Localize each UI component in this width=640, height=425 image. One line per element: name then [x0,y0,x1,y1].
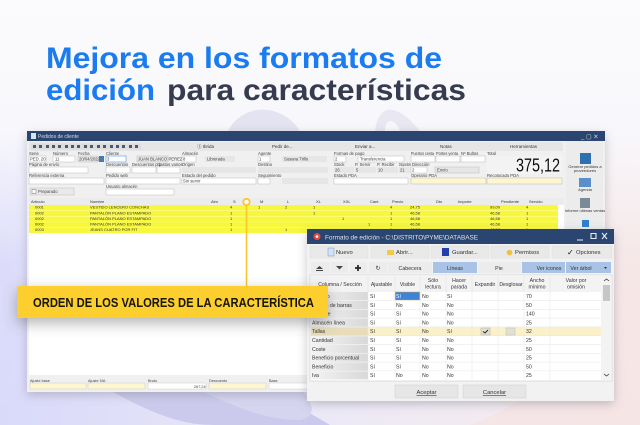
articles table: 1 [390,216,393,221]
toolbar: Herramientas [510,144,538,149]
table header: Columna / Sección [318,282,362,288]
order form fields: Seguimiento [258,173,282,178]
row labels: Artículo [312,294,330,300]
total amount [487,156,562,176]
row labels: Coste [312,347,326,353]
row values: No [422,329,429,335]
dialog: formato de edición [307,229,614,401]
articles table: 0003 [35,227,45,232]
articles table: S [233,199,236,204]
row values: No [447,320,454,326]
order form fields: 26 [335,168,340,172]
dialog tabs [311,262,611,273]
order form fields: 2 [412,168,415,172]
row values: Sí [370,303,375,309]
totals strip [30,379,309,389]
row values: Sí [370,356,375,362]
dialog tabs: Pie [495,266,503,272]
row labels: Nombre [312,312,331,318]
row values: No [422,294,429,300]
order form fields: 8 [183,156,186,162]
articles table: Alm [211,199,219,204]
articles table: 46,58 [490,227,501,232]
articles table: PANTALÓN PLANO ESTAMPADO [90,216,151,221]
articles table: 46,58 [410,210,421,215]
articles table: 1 [526,222,529,227]
articles table: 1 [526,210,529,215]
table header: Desglosar [499,282,523,288]
articles table: 1 [390,222,393,227]
callout banner [17,286,328,318]
order form fields: 5 [356,168,359,172]
row values: Sí [396,294,401,300]
highlighted row [311,327,601,336]
row values: No [422,303,429,309]
articles table: 1 [390,210,393,215]
dialog action buttons: Abrir... [396,250,413,256]
side action panel [565,141,605,376]
order form fields: Librerada [207,156,225,162]
row values: Sí [396,364,401,370]
row values: Sí [396,356,401,362]
order form fields: Número [53,151,69,156]
order form fields: Portes yenta [436,151,459,156]
articles table: 46,58 [410,216,421,221]
articles table: 24,75 [410,204,421,210]
articles table: 99,00 [490,204,501,210]
window title bar: Pedidos de cliente [38,134,79,140]
articles table: 1 [368,222,371,227]
side action panel: Generar pedidos a [568,164,602,169]
order form fields: 21 [400,168,405,172]
row values: Sí [396,329,401,335]
panel: pedidos de cliente window [27,131,605,392]
order form fields: Agente [258,151,272,156]
row values: No [422,320,429,326]
window title bar [27,131,605,141]
dialog action buttons: Nuevo [336,250,353,256]
table header: Visible [400,282,415,288]
dialog tabs: Líneas [447,266,463,272]
totals strip: 267,24 [194,385,206,389]
articles table: 46,58 [490,210,501,215]
order form fields: Descuentos p.p. [132,162,162,167]
articles table [29,198,564,375]
toolbar: Enviar a... [355,144,375,149]
table header: Hacer [452,278,466,284]
order form fields: Usuario almacén [106,184,138,189]
articles table: XL [316,199,322,204]
articles table: 2 [285,204,288,210]
row values: 50 [526,303,532,309]
order form fields: Transferencia [360,156,386,162]
row values: 50 [526,364,532,370]
row values: Sí [370,312,375,318]
order form fields: Dirección [412,162,430,167]
order form fields: Cliente [106,151,120,156]
articles table: 46,58 [410,227,421,232]
order form fields: Disponible [399,162,411,167]
articles table: 1 [526,227,529,232]
articles table: 0001 [35,204,45,210]
order form fields: Puertos cesta [411,151,435,156]
row values: Sí [370,373,375,379]
order form fields: Pedido web [106,173,129,178]
row values: No [447,347,454,353]
order form fields: Serie [29,151,39,156]
order form fields: JUAN BLANCO PEREZ [138,156,183,162]
dialog tabs: ↻ [375,265,381,272]
row values: Sí [370,347,375,353]
row values: Sí [370,364,375,370]
articles table: Servido [529,199,543,204]
order form fields: Envío [437,168,448,172]
row values: 140 [526,312,535,318]
order form fields: Estado del pedido [182,173,216,178]
order form fields: Origen [182,162,195,167]
articles table: Nombre [90,199,105,204]
order form fields: Estado PDA [334,173,357,178]
articles table: L [287,199,290,204]
articles table: 4 [230,204,233,210]
dialog tabs: Ver árbol [570,266,592,272]
order form fields: 11 [55,156,60,162]
row values: Sí [370,320,375,326]
row values: Sí [447,329,452,335]
table header: mínimo [528,284,546,290]
totals strip: Base [269,379,278,383]
side action panel: Informe últimas ventas [565,208,605,213]
articles table: 4 [526,204,529,210]
row values: 32 [526,329,532,335]
row values: Sí [447,294,452,300]
title: Mejora en los formatos de [46,42,442,75]
edit format table [310,275,612,381]
row labels: Iva [312,373,319,379]
row values: No [447,338,454,344]
row values: 25 [526,356,532,362]
row labels [311,292,368,379]
dialog tabs: Ver iconos [537,266,562,272]
row labels: Tallas [312,329,326,335]
dialog title bar: Formato de edición - C:\DISTRITO\PYME\DATABASE [325,234,479,242]
table header: parada [451,284,467,290]
order form fields: P. Recibir [377,162,395,167]
toolbar [29,142,563,151]
articles table: 0002 [35,222,45,227]
side action panel: proveedores [574,168,596,173]
order form fields: Recolocado PDA [487,173,519,178]
articles table: Dto [436,199,443,204]
articles table: 1 [230,210,233,215]
row values: No [422,338,429,344]
row values [311,292,601,380]
title: para características [167,74,466,107]
row values: No [396,303,403,309]
callout banner: ORDEN DE LOS VALORES DE LA CARACTERÍSTICA [33,295,314,310]
dialog action buttons: ✓ [567,248,574,257]
order form fields: Stock [334,162,345,167]
order form fields [29,151,562,195]
dialog footer buttons: Cancelar [483,390,506,396]
order form fields: Formas de pago [334,151,365,156]
articles table: XXL [343,199,351,204]
order form fields: Página de envío [29,162,60,167]
dialog footer buttons: Aceptar [417,390,437,396]
toolbar: Notas [440,144,453,149]
window title bar: _ ▢ ✕ [580,134,598,140]
order form fields: Referencia externa [29,173,65,178]
articles table: 1 [258,204,261,210]
toolbar: Pedir de... [272,144,293,149]
row labels: Cantidad [312,338,333,344]
dialog footer buttons [395,385,526,398]
order form fields: PED. 20 [30,156,46,162]
articles table: 1 [230,222,233,227]
articles table: Artículo [31,199,45,204]
totals strip: Descuento [209,379,227,383]
order form fields: P. Servir [355,162,371,167]
articles table: 46,58 [490,222,501,227]
articles table: PANTALÓN PLANO ESTAMPADO [90,222,151,227]
order form fields: Almacén [182,151,199,156]
articles table: 46,58 [490,216,501,221]
row values: No [447,373,454,379]
order form fields: Preparado [38,189,58,194]
totals strip: Ajuste IVA [88,379,106,383]
row values: No [396,373,403,379]
articles table: 1 [230,216,233,221]
row labels: Beneficio porcentual [312,356,359,362]
row values: Sí [396,312,401,318]
table header: Valor por [566,278,587,284]
row values: No [447,364,454,370]
row values: Sí [396,338,401,344]
row values: No [422,373,429,379]
order form fields: 10 [378,168,383,172]
articles table: 1 [526,216,529,221]
dialog action buttons: Opciones [576,250,601,256]
order form fields: Destino [258,162,273,167]
order form fields: Gastos varios [157,162,183,167]
articles table: 0002 [35,210,45,215]
side action panel: Agenda [578,187,593,192]
title [46,42,466,107]
table header: Expandir [475,282,496,288]
articles table: 1 [342,216,345,221]
dialog tabs: Cabecera [399,266,422,272]
table header: Ajustable [371,282,392,288]
totals strip: Bruto [148,379,157,383]
articles table: 4 [390,204,393,210]
total amount: 375,12 [516,156,560,176]
row values: Sí [370,329,375,335]
row values: No [447,312,454,318]
articles table: Importe [458,199,472,204]
row labels: Código de barras [312,303,352,309]
table header: omisión [567,284,585,290]
order form fields: Fecha [78,151,90,156]
row values: Sí [396,320,401,326]
row labels: Beneficio [312,364,333,370]
row values: No [447,356,454,362]
totals strip: Ajuste base [30,379,50,383]
dialog action buttons: Guardar... [452,250,478,256]
articles table: VESTIDO LENCERO CONCHAS [90,204,149,210]
row labels: Almacén línea [312,320,345,326]
order form fields: 1 [259,156,262,162]
dialog action buttons [310,246,612,258]
order form fields: Total [487,151,496,156]
row values: No [422,312,429,318]
articles table: Pendiente [501,199,520,204]
order form fields: Sin servir [183,178,201,184]
row values: Sí [370,338,375,344]
dialog action buttons: Permisos [515,250,539,256]
articles table: 0002 [35,216,45,221]
table header [311,276,601,292]
articles table: 1 [285,227,288,232]
row values: 25 [526,338,532,344]
row values: 25 [526,320,532,326]
order form fields: 20/04/2022 [79,156,101,162]
articles table: 1 [313,210,316,215]
row values: No [422,356,429,362]
row values: Sí [370,294,375,300]
articles table: 1 [230,227,233,232]
articles table: 1 [313,204,316,210]
order form fields: Nº Bultos [461,151,478,156]
order form fields: Descuentos [106,162,128,167]
table header: Sólo [428,278,438,284]
articles table: 46,58 [410,222,421,227]
row values: No [422,364,429,370]
articles table: 1 [390,227,393,232]
marker line and circle [243,199,250,287]
table header: Ancho [530,278,544,284]
toolbar: Ⓘ Ibrida [197,143,215,150]
order form fields: Susana Trillo [284,156,309,162]
articles table: Cant [370,199,379,204]
articles table: PANTALÓN PLANO ESTAMPADO [90,210,151,215]
row values: No [422,347,429,353]
articles table: JEANS CUATRO POR FIT [90,227,138,232]
articles table: M [260,199,263,204]
table header: lectura [425,284,441,290]
row values: Sí [396,347,401,353]
order form fields: 2 [335,156,338,162]
dialog title bar [307,229,614,244]
scrollbar [601,276,611,380]
row values: No [447,303,454,309]
row values: 70 [526,294,532,300]
row values: 50 [526,347,532,353]
row values: 25 [526,373,532,379]
order form fields: 3 [107,156,110,162]
title: edición [46,74,155,107]
articles table: Precio [392,199,404,204]
order form fields: Operario PDA [411,173,437,178]
